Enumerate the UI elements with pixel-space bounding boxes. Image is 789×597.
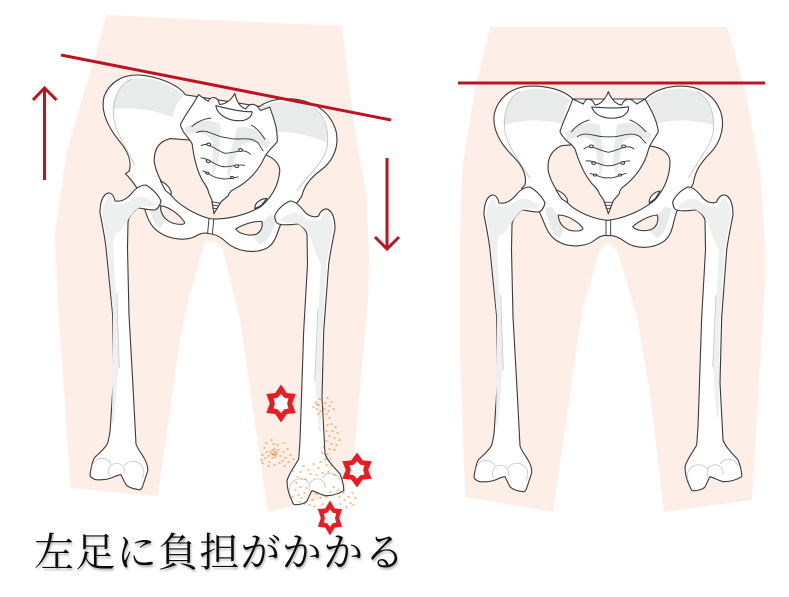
body silhouette left (55, 15, 369, 512)
tilt line (61, 55, 391, 120)
star marker right (342, 452, 372, 488)
caption: 左足に負担がかかる (34, 530, 406, 575)
star marker upper (266, 384, 296, 422)
panel: right body, level pelvis (458, 27, 765, 512)
pelvis left (92, 70, 340, 264)
arrow up (33, 88, 56, 180)
femur right (673, 187, 742, 491)
pelvis right (494, 86, 722, 247)
level line (458, 82, 765, 84)
arrow down (375, 158, 399, 249)
pain dots (261, 398, 356, 509)
body silhouette right (460, 27, 765, 512)
femur right side of left figure (275, 201, 344, 505)
panel: left body, tilted pelvis (33, 15, 399, 536)
femur left side of left figure (90, 185, 161, 490)
star marker lower (318, 500, 342, 536)
femur left (474, 187, 545, 492)
